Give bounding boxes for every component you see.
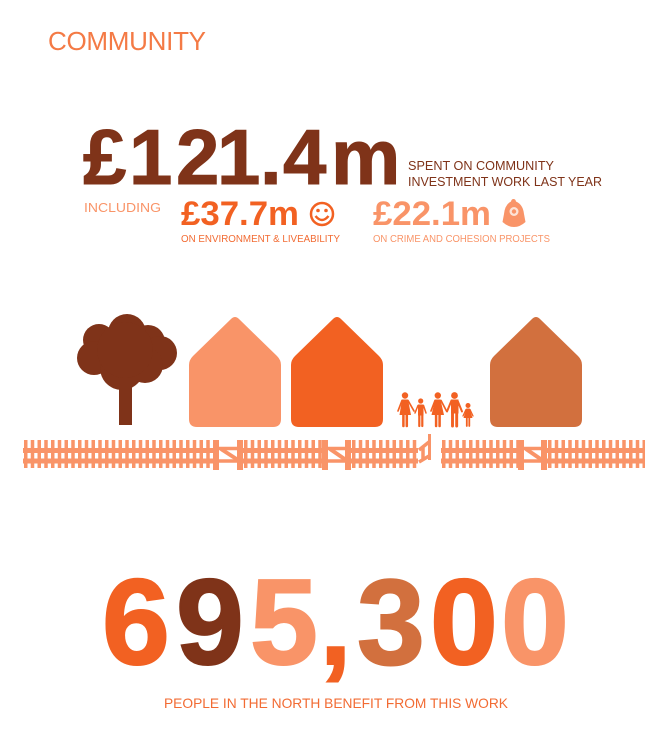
icon: house light <box>189 317 281 427</box>
icon: house orange <box>291 317 383 427</box>
large number: 5 <box>250 554 318 690</box>
icon: police helmet <box>502 199 526 227</box>
large number: 6 <box>102 554 170 690</box>
figure: woman two <box>431 392 446 426</box>
stat: crime: £22.1m <box>373 195 491 233</box>
fence section: third <box>348 450 418 461</box>
fence gate: first <box>216 440 240 470</box>
large number: 9 <box>176 554 244 690</box>
fence gate: open <box>419 434 430 462</box>
fence section: fourth <box>441 450 521 461</box>
figure: child one <box>415 398 426 426</box>
figure: woman one <box>398 392 414 426</box>
fence section: left <box>23 450 216 461</box>
title: COMMUNITY <box>48 26 206 56</box>
headline description: SPENT ON COMMUNITY <box>408 158 554 173</box>
large number: 0 <box>501 554 569 690</box>
large number: 0 <box>430 554 498 690</box>
large number: 3 <box>357 554 425 690</box>
headline figure: £121.4m <box>83 113 400 201</box>
headline description <box>408 158 602 189</box>
large number: , <box>320 563 351 688</box>
fence section: right <box>544 450 645 461</box>
icon: house mid <box>490 317 582 427</box>
fence gate: third <box>521 440 544 470</box>
fence <box>23 434 645 470</box>
fence gate: second <box>325 440 348 470</box>
icon: smiley <box>311 203 333 225</box>
headline description: INVESTMENT WORK LAST YEAR <box>408 174 602 189</box>
figure: man <box>447 392 462 426</box>
stat: environment: £37.7m <box>181 195 299 233</box>
figure: child two <box>463 403 473 426</box>
stat: crime <box>373 195 550 245</box>
stat: environment <box>181 195 340 245</box>
icon: family <box>398 392 473 426</box>
number caption: PEOPLE IN THE NORTH BENEFIT FROM THIS WORK <box>164 695 509 711</box>
icon: tree <box>77 314 177 425</box>
stat: crime: ON CRIME AND COHESION PROJECTS <box>373 234 550 245</box>
fence section: second <box>240 450 325 461</box>
including label: INCLUDING <box>84 200 161 215</box>
stat: environment: ON ENVIRONMENT & LIVEABILITY <box>181 234 340 245</box>
